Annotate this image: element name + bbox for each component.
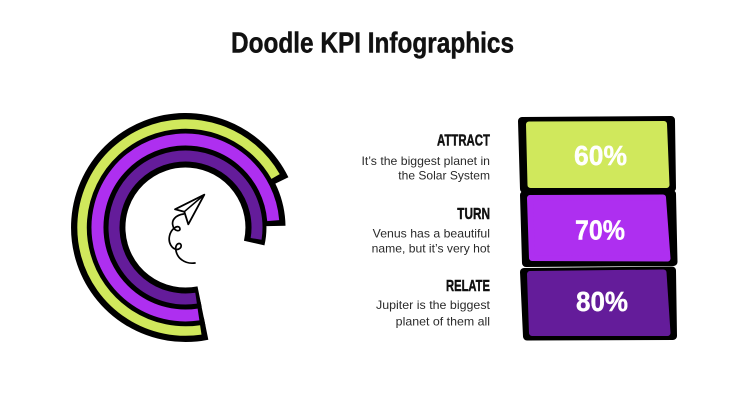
text block: relate: Jupiter is the biggest xyxy=(376,298,491,312)
ring: attract 60% xyxy=(82,124,276,331)
text block: turn xyxy=(372,206,491,255)
icon: paper plane xyxy=(169,195,204,263)
value: 60%: 60% xyxy=(574,140,627,171)
title: Doodle KPI Infographics xyxy=(231,28,514,60)
ring: turn 70% xyxy=(97,139,273,315)
panel: relate value box xyxy=(524,270,673,336)
text block: turn: name, but it’s very hot xyxy=(372,241,491,255)
text block: relate: RELATE xyxy=(446,278,490,295)
ring: relate 80% xyxy=(114,156,257,299)
value: 70%: 70% xyxy=(575,214,625,245)
text block: turn: Venus has a beautiful xyxy=(373,227,490,241)
text block: turn: TURN xyxy=(457,206,490,223)
text block: attract xyxy=(362,133,490,183)
text block: attract: It’s the biggest planet in xyxy=(362,154,490,168)
ring outlines xyxy=(82,124,278,331)
text block: relate xyxy=(376,278,491,329)
radial progress chart xyxy=(82,124,278,331)
text block: relate: planet of them all xyxy=(396,315,490,329)
panel: attract value box xyxy=(522,120,672,189)
text block: attract: the Solar System xyxy=(398,169,490,183)
text block: attract: ATTRACT xyxy=(437,133,490,150)
value: 80%: 80% xyxy=(576,286,628,317)
panel: turn value box xyxy=(524,194,674,263)
